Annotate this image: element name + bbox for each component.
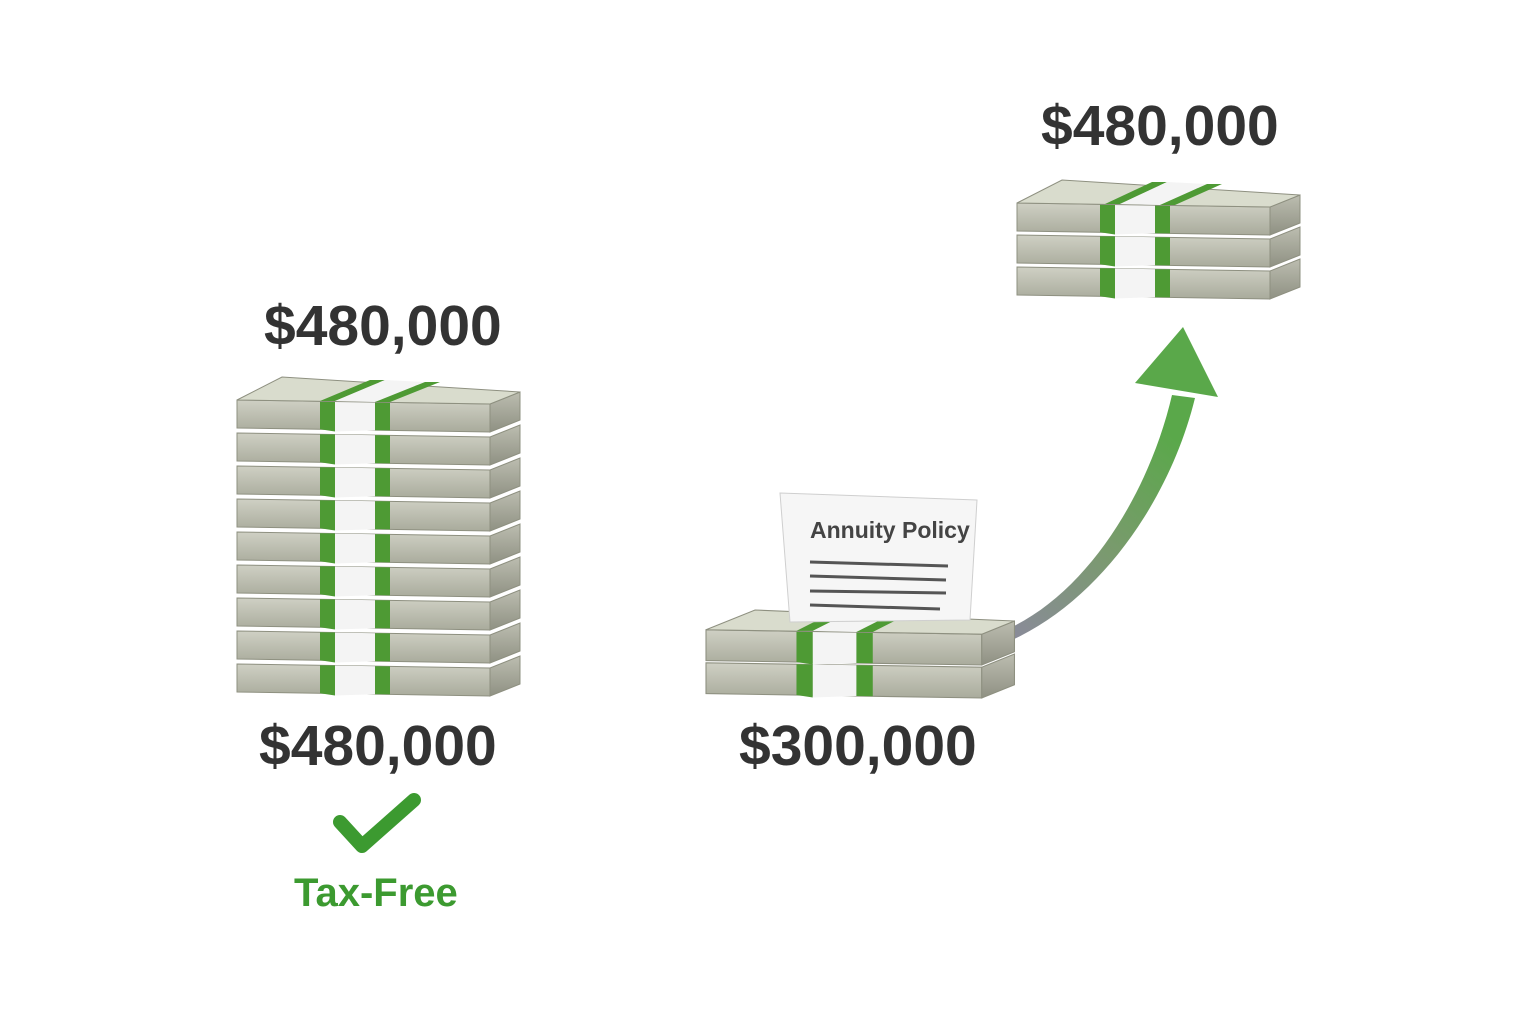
annuity policy document: Annuity Policy (810, 517, 970, 543)
label: middle amount: $300,000 (739, 714, 977, 778)
label: top right amount: $480,000 (1041, 94, 1279, 158)
annuity policy document (780, 493, 977, 622)
top right stack (1017, 180, 1300, 299)
label: left bottom amount: $480,000 (259, 714, 497, 778)
bottom middle stack (706, 610, 1014, 698)
checkmark icon (340, 800, 414, 846)
arrow (1010, 327, 1218, 640)
label: left top amount: $480,000 (264, 294, 502, 358)
left stack (237, 377, 520, 696)
label: tax-free: Tax-Free (294, 871, 458, 915)
